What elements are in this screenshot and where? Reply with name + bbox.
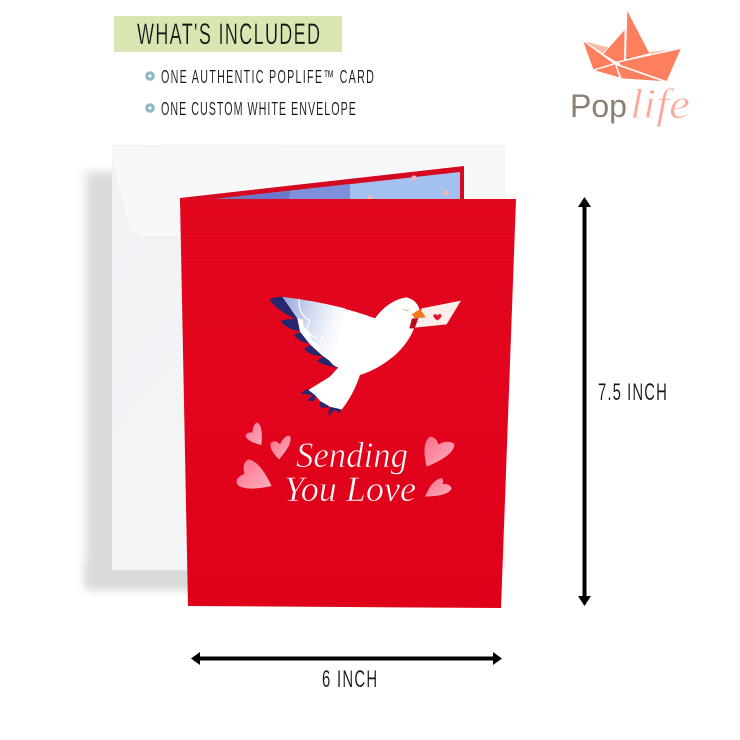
envelope flap — [112, 146, 506, 236]
dove eye — [403, 309, 409, 311]
card front — [180, 199, 516, 608]
heart 1 — [246, 423, 262, 445]
letter shadow — [409, 318, 418, 328]
dove navy feathers — [269, 297, 342, 416]
bullet item: card: ONE AUTHENTIC POPLIFE™ CARD — [161, 67, 374, 88]
icon: origami boat — [583, 11, 681, 81]
envelope body — [112, 145, 506, 570]
hearts — [237, 423, 454, 497]
card message — [284, 435, 416, 509]
letter — [415, 301, 461, 328]
envelope shadow — [86, 172, 196, 588]
dove wing scallops — [299, 299, 342, 367]
logo: Poplife — [570, 11, 690, 128]
heading: what's included: WHAT'S INCLUDED — [137, 19, 320, 51]
dove wing shading — [283, 297, 347, 367]
label: height: 7.5 INCH — [598, 380, 667, 406]
card message: You Love — [284, 469, 416, 509]
envelope with shadow — [86, 145, 506, 588]
dove body — [283, 297, 419, 410]
heart 5 — [425, 478, 452, 497]
beak — [412, 309, 426, 318]
bullet item: envelope: ONE CUSTOM WHITE ENVELOPE — [161, 99, 356, 120]
label: width: 6 INCH — [322, 667, 377, 693]
arrow: width dimension — [191, 652, 502, 665]
logo wordmark — [570, 82, 690, 128]
logo wordmark: Pop — [570, 88, 627, 124]
heart 3 — [237, 459, 272, 489]
arrow: height dimension — [578, 197, 591, 606]
heart 4 — [424, 437, 454, 467]
list of included items — [147, 67, 374, 120]
illustration: dove carrying a letter — [269, 297, 461, 416]
heart 2 — [270, 436, 291, 459]
card back with interior — [180, 166, 464, 205]
card message: Sending — [296, 435, 408, 475]
letter heart — [433, 314, 442, 321]
logo wordmark: life — [630, 82, 690, 128]
